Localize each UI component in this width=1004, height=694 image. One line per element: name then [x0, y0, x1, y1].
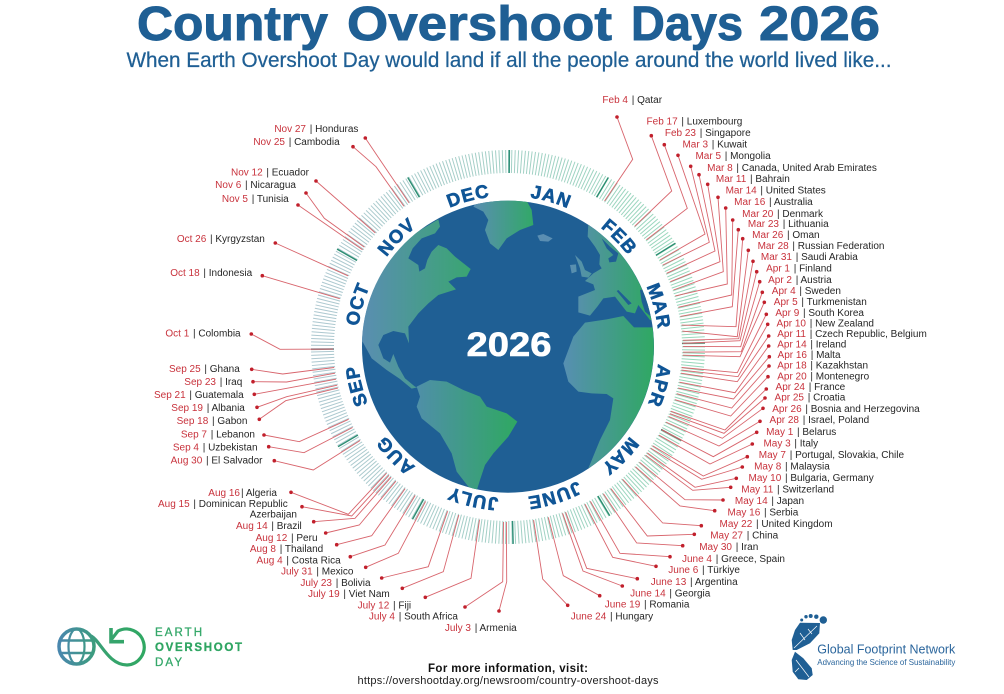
- July 12 Fiji: | Fiji: [393, 600, 411, 612]
- May 30 Iran: May 30: [699, 542, 732, 553]
- June 13 Argentina: | Argentina: [690, 577, 738, 588]
- Apr 11 Czech Republic, Belgium: [681, 329, 927, 382]
- country labels and connectors: right side: [534, 95, 927, 622]
- Mar 20 Denmark: Mar 20: [742, 209, 774, 220]
- Apr 1 Finland: [683, 264, 832, 343]
- Apr 28 Israel, Poland: Apr 28: [770, 415, 799, 426]
- Apr 14 Ireland: [680, 340, 846, 393]
- Mar 3 Kuwait: Mar 3: [682, 140, 708, 150]
- Mar 16 Australia: Mar 16: [734, 197, 766, 208]
- Sep 19 Albania: Sep 19: [171, 403, 203, 414]
- Aug 4 Costa Rica: [257, 495, 415, 566]
- Mar 28 Russian Federation: [682, 241, 884, 337]
- continent: Africa: [563, 316, 662, 470]
- May 1 Belarus: [662, 427, 836, 457]
- June 19 Romania: | Romania: [644, 600, 690, 610]
- Mar 26 Oman: | Oman: [787, 230, 820, 241]
- Nov 25 Cambodia: [253, 137, 404, 206]
- Mar 14 United States: | United States: [760, 186, 826, 196]
- Apr 9 South Korea: [682, 308, 864, 373]
- May 16 Serbia: [636, 467, 799, 518]
- Mar 14 United States: Mar 14: [726, 186, 757, 196]
- Sep 23 Iraq: | Iraq: [220, 377, 242, 388]
- Apr 26 Bosnia and Herzegovina: | Bosnia and Herzegovina: [805, 404, 920, 415]
- Feb 23 Singapore: | Singapore: [700, 128, 751, 139]
- Apr 4 Sweden: [683, 286, 841, 352]
- Nov 5 Tunisia: | Tunisia: [252, 194, 289, 205]
- Sep 25 Ghana: | Ghana: [204, 364, 240, 375]
- May 14 Japan: | Japan: [771, 496, 804, 507]
- May 8 Malaysia: [651, 448, 830, 479]
- Mar 3 Kuwait: [660, 140, 747, 260]
- Apr 28 Israel, Poland: | Israel, Poland: [803, 415, 869, 426]
- May 27 China: | China: [747, 530, 779, 542]
- July 12 Fiji: July 12: [358, 600, 390, 612]
- May 27 China: [611, 489, 779, 542]
- Nov 12 Ecuador: [231, 168, 375, 233]
- continent: South America: [417, 380, 517, 491]
- Apr 1 Finland: Apr 1: [766, 264, 790, 274]
- May 11 Switzerland: [646, 455, 834, 496]
- Apr 14 Ireland: | Ireland: [810, 340, 846, 350]
- Oct 18 Indonesia: [170, 268, 340, 299]
- Nov 25 Cambodia: Nov 25: [253, 137, 285, 148]
- July 19 Viet Nam: [308, 515, 459, 600]
- July 23 Bolivia: | Bolivia: [336, 578, 371, 589]
- Aug 15 Dominican Republic, Azerbaijan: Azerbaijan: [250, 510, 297, 520]
- Apr 2 Austria: [683, 275, 832, 347]
- May 10 Bulgaria, Germany: May 10: [749, 473, 782, 484]
- Mar 5 Mongolia: Mar 5: [695, 151, 721, 162]
- Mar 16 Australia: | Australia: [769, 197, 813, 208]
- Mar 31 Saudi Arabia: Mar 31: [761, 252, 792, 263]
- subtitle: When Earth Overshoot Day would land if all the people around the world lived like...: [126, 49, 892, 72]
- month labels: NOV: [376, 216, 412, 257]
- May 3 Italy: | Italy: [794, 438, 818, 450]
- Aug 30 El Salvador: Aug 30: [171, 456, 203, 466]
- Mar 5 Mongolia: [663, 151, 771, 265]
- Sep 7 Lebanon: Sep 7: [181, 430, 207, 440]
- Aug 16 Algeria: Aug 16: [208, 488, 240, 499]
- text: Day: DAY: [155, 657, 182, 669]
- Oct 18 Indonesia: Oct 18: [170, 268, 200, 279]
- Mar 8 Canada, United Arab Emirates: Mar 8: [707, 163, 733, 174]
- May 14 Japan: [640, 462, 804, 507]
- Aug 12 Peru: [256, 481, 396, 544]
- Sep 19 Albania: [171, 385, 337, 414]
- logo: Global Footprint Network: [792, 614, 956, 680]
- Sep 18 Gabon: [177, 388, 338, 427]
- text: tagline: Advancing the Science of Sustainability: [817, 657, 956, 667]
- Apr 5 Turkmenistan: [683, 297, 867, 357]
- Aug 8 Thailand: Aug 8: [250, 544, 276, 555]
- Oct 1 Colombia: [165, 328, 333, 349]
- Apr 10 New Zealand: Apr 10: [777, 318, 806, 330]
- continent: Eurasia: [578, 224, 652, 320]
- Apr 11 Czech Republic, Belgium: Apr 11: [777, 329, 806, 340]
- May 11 Switzerland: May 11: [741, 484, 774, 496]
- Apr 4 Sweden: | Sweden: [799, 286, 841, 297]
- Nov 27 Honduras: Nov 27: [274, 124, 306, 135]
- Feb 23 Singapore: [646, 128, 751, 240]
- June 6 Türkiye: [585, 504, 740, 576]
- July 3 Armenia: | Armenia: [475, 623, 517, 634]
- Apr 20 Montenegro: | Montenegro: [810, 372, 870, 382]
- Apr 25 Croatia: Apr 25: [775, 392, 804, 404]
- June 19 Romania: [548, 517, 690, 610]
- Aug 15 Dominican Republic, Azerbaijan: | Dominican Republic: [193, 499, 288, 510]
- May 8 Malaysia: | Malaysia: [785, 462, 830, 472]
- July 19 Viet Nam: July 19: [308, 589, 340, 600]
- Apr 10 New Zealand: [681, 318, 874, 377]
- Apr 14 Ireland: Apr 14: [777, 340, 807, 350]
- Aug 4 Costa Rica: | Costa Rica: [286, 556, 341, 566]
- title: [137, 0, 880, 51]
- July 19 Viet Nam: | Viet Nam: [343, 589, 390, 600]
- Apr 2 Austria: Apr 2: [768, 275, 792, 286]
- July 4 South Africa: July 4: [369, 612, 395, 622]
- Mar 11 Bahrain: | Bahrain: [750, 174, 790, 185]
- Aug 30 El Salvador: | El Salvador: [206, 456, 263, 466]
- Mar 16 Australia: [675, 197, 813, 296]
- June 13 Argentina: [566, 512, 738, 588]
- Sep 21 Guatemala: | Guatemala: [189, 390, 244, 401]
- Apr 4 Sweden: Apr 4: [772, 286, 796, 297]
- globe: [362, 200, 654, 493]
- month labels: JULY: [446, 488, 498, 510]
- Apr 18 Kazakhstan: | Kazakhstan: [810, 360, 868, 372]
- July 4 South Africa: | South Africa: [399, 612, 458, 622]
- Aug 30 El Salvador: [171, 440, 360, 470]
- text: Global Footprint Network: Global Footprint Network: [817, 642, 956, 656]
- June 14 Georgia: [563, 513, 711, 600]
- May 10 Bulgaria, Germany: | Bulgaria, Germany: [785, 473, 874, 484]
- month labels: APR: [648, 364, 670, 406]
- Mar 23 Lithuania: | Lithuania: [783, 219, 829, 230]
- Feb 17 Luxembourg: Feb 17: [647, 116, 678, 128]
- Apr 24 France: [671, 382, 846, 430]
- Sep 25 Ghana: Sep 25: [169, 364, 201, 375]
- Mar 14 United States: [674, 186, 826, 290]
- Mar 8 Canada, United Arab Emirates: [667, 163, 877, 273]
- Nov 5 Tunisia: [222, 194, 363, 250]
- Apr 2 Austria: | Austria: [796, 275, 832, 286]
- Nov 12 Ecuador: | Ecuador: [266, 168, 310, 178]
- Apr 25 Croatia: [670, 392, 846, 433]
- Mar 31 Saudi Arabia: [683, 252, 858, 340]
- June 24 Hungary: | Hungary: [610, 612, 653, 622]
- May 7 Portugal, Slovakia, Chile: May 7: [759, 450, 786, 461]
- Apr 24 France: Apr 24: [776, 382, 805, 393]
- July 31 Mexico: July 31: [281, 566, 313, 578]
- Sep 23 Iraq: [184, 373, 335, 388]
- Nov 27 Honduras: [274, 124, 409, 203]
- month labels: JUNE: [528, 482, 580, 510]
- Feb 17 Luxembourg: | Luxembourg: [681, 116, 742, 128]
- Aug 14 Brazil: | Brazil: [271, 521, 302, 532]
- July 12 Fiji: [358, 520, 480, 612]
- July 31 Mexico: | Mexico: [316, 566, 354, 578]
- May 8 Malaysia: May 8: [754, 462, 782, 472]
- calendar tick ring: [311, 150, 705, 544]
- Aug 8 Thailand: | Thailand: [280, 544, 323, 555]
- June 4 Greece, Spain: [590, 501, 785, 565]
- Apr 10 New Zealand: | New Zealand: [810, 318, 874, 330]
- July 31 Mexico: [281, 501, 426, 578]
- Feb 4 Qatar: Feb 4: [602, 95, 628, 106]
- Apr 9 South Korea: Apr 9: [775, 308, 800, 319]
- May 1 Belarus: | Belarus: [797, 427, 836, 438]
- Apr 16 Malta: [678, 350, 841, 399]
- icon: globe with loop arrow: [59, 628, 144, 665]
- Apr 1 Finland: | Finland: [794, 264, 832, 274]
- Oct 26 Kyrgyzstan: | Kyrgyzstan: [210, 234, 265, 245]
- May 22 United Kingdom: May 22: [720, 519, 753, 530]
- May 11 Switzerland: | Switzerland: [777, 484, 834, 496]
- Aug 12 Peru: | Peru: [291, 533, 318, 544]
- year label: 2026: [466, 326, 552, 364]
- May 16 Serbia: May 16: [728, 508, 761, 518]
- month labels: [346, 184, 670, 510]
- month labels: AUG: [378, 438, 416, 474]
- Apr 24 France: | France: [809, 382, 846, 393]
- May 10 Bulgaria, Germany: [647, 453, 874, 487]
- text: Overshoot: OVERSHOOT: [155, 642, 242, 654]
- Nov 27 Honduras: | Honduras: [310, 124, 358, 135]
- Mar 5 Mongolia: | Mongolia: [725, 151, 771, 162]
- Mar 23 Lithuania: Mar 23: [748, 219, 779, 230]
- May 7 Portugal, Slovakia, Chile: [653, 446, 904, 476]
- Apr 18 Kazakhstan: Apr 18: [777, 360, 807, 372]
- July 23 Bolivia: [300, 511, 448, 589]
- sea: Adriatic and Black Sea: [616, 290, 651, 316]
- footer: more information: https://overshootday.org/newsroom/country-overshoot-days: [358, 675, 659, 687]
- Aug 15 Dominican Republic, Azerbaijan: [158, 475, 389, 520]
- continent: Iceland: [537, 234, 553, 242]
- country labels and connectors: left side: [154, 124, 517, 634]
- Mar 11 Bahrain: Mar 11: [716, 174, 747, 185]
- Aug 8 Thailand: [250, 489, 405, 555]
- May 7 Portugal, Slovakia, Chile: | Portugal, Slovakia, Chile: [790, 450, 904, 461]
- Mar 11 Bahrain: [670, 174, 790, 282]
- Sep 23 Iraq: Sep 23: [184, 377, 216, 388]
- Aug 15 Dominican Republic, Azerbaijan: Aug 15: [158, 499, 190, 510]
- Sep 4 Uzbekistan: | Uzbekistan: [203, 442, 258, 454]
- footer: more information: For more information, visit:: [428, 663, 588, 675]
- Sep 21 Guatemala: [154, 379, 336, 401]
- Sep 4 Uzbekistan: Sep 4: [173, 442, 199, 454]
- logo: Earth Overshoot Day: [59, 627, 242, 669]
- June 24 Hungary: June 24: [571, 612, 607, 622]
- month labels: SEP: [346, 368, 367, 406]
- June 4 Greece, Spain: | Greece, Spain: [716, 554, 785, 565]
- continent: Greenland: [474, 200, 534, 250]
- continent: North America: [350, 219, 471, 389]
- Mar 20 Denmark: [678, 209, 824, 307]
- Apr 28 Israel, Poland: [666, 415, 869, 446]
- May 3 Italy: May 3: [763, 438, 791, 450]
- Nov 12 Ecuador: Nov 12: [231, 168, 263, 178]
- Oct 1 Colombia: Oct 1: [165, 328, 190, 340]
- Apr 18 Kazakhstan: [677, 360, 868, 408]
- Oct 1 Colombia: | Colombia: [193, 328, 241, 340]
- sea: Baltic: [602, 238, 618, 262]
- Nov 25 Cambodia: | Cambodia: [289, 137, 340, 148]
- Sep 4 Uzbekistan: [173, 428, 353, 454]
- June 13 Argentina: June 13: [651, 577, 687, 588]
- Sep 21 Guatemala: Sep 21: [154, 390, 186, 401]
- Sep 7 Lebanon: | Lebanon: [211, 430, 255, 440]
- Sep 25 Ghana: [169, 364, 334, 375]
- Sep 18 Gabon: Sep 18: [177, 416, 209, 427]
- July 23 Bolivia: July 23: [300, 578, 332, 589]
- Aug 16 Algeria: | Algeria: [241, 488, 277, 499]
- month labels: OCT: [346, 282, 368, 325]
- June 6 Türkiye: | Türkiye: [702, 565, 740, 576]
- Oct 18 Indonesia: | Indonesia: [203, 268, 253, 279]
- month labels: MAY: [604, 436, 640, 476]
- Apr 26 Bosnia and Herzegovina: [669, 404, 920, 438]
- Feb 4 Qatar: [602, 95, 663, 201]
- Aug 16 Algeria: [208, 473, 387, 514]
- Apr 9 South Korea: | South Korea: [803, 308, 864, 319]
- Apr 20 Montenegro: Apr 20: [777, 372, 807, 382]
- June 19 Romania: June 19: [605, 600, 641, 610]
- footer: more information: [358, 663, 659, 687]
- Oct 26 Kyrgyzstan: [177, 234, 348, 276]
- Apr 5 Turkmenistan: Apr 5: [774, 297, 798, 308]
- May 22 United Kingdom: [623, 479, 833, 530]
- May 22 United Kingdom: | United Kingdom: [756, 519, 833, 530]
- June 14 Georgia: June 14: [630, 588, 666, 600]
- Nov 6 Nicaragua: | Nicaragua: [245, 180, 296, 191]
- Aug 4 Costa Rica: Aug 4: [257, 556, 283, 566]
- Sep 18 Gabon: | Gabon: [212, 416, 247, 427]
- May 27 China: May 27: [710, 530, 743, 542]
- Aug 12 Peru: Aug 12: [256, 533, 288, 544]
- Nov 5 Tunisia: Nov 5: [222, 194, 248, 205]
- Apr 16 Malta: | Malta: [811, 350, 841, 361]
- Feb 23 Singapore: Feb 23: [665, 128, 696, 139]
- May 30 Iran: | Iran: [736, 542, 758, 553]
- May 3 Italy: [659, 435, 818, 464]
- Oct 26 Kyrgyzstan: Oct 26: [177, 234, 207, 245]
- May 14 Japan: May 14: [735, 496, 768, 507]
- Mar 23 Lithuania: [680, 219, 829, 316]
- icon: leaf footprint: [792, 614, 827, 680]
- June 14 Georgia: | Georgia: [669, 588, 711, 600]
- Mar 26 Oman: Mar 26: [752, 230, 784, 241]
- continent: British Isles: [570, 255, 592, 278]
- July 4 South Africa: [369, 522, 504, 622]
- Apr 5 Turkmenistan: | Turkmenistan: [801, 297, 867, 308]
- Mar 20 Denmark: | Denmark: [777, 209, 824, 220]
- Mar 28 Russian Federation: | Russian Federation: [792, 241, 884, 252]
- June 6 Türkiye: June 6: [668, 565, 699, 576]
- Nov 6 Nicaragua: [215, 180, 364, 247]
- text: Earth: EARTH: [155, 627, 202, 639]
- May 16 Serbia: | Serbia: [764, 508, 799, 518]
- Nov 6 Nicaragua: Nov 6: [215, 180, 242, 191]
- Sep 7 Lebanon: [181, 419, 349, 442]
- Mar 8 Canada, United Arab Emirates: | Canada, United Arab Emirates: [736, 163, 877, 174]
- Aug 14 Brazil: [236, 477, 391, 532]
- May 1 Belarus: May 1: [766, 427, 794, 438]
- month labels: FEB: [601, 218, 636, 254]
- Sep 19 Albania: | Albania: [207, 403, 245, 414]
- month labels: MAR: [646, 282, 670, 329]
- Apr 16 Malta: Apr 16: [778, 350, 807, 361]
- June 24 Hungary: [534, 520, 653, 622]
- Mar 28 Russian Federation: Mar 28: [758, 241, 789, 252]
- Apr 25 Croatia: | Croatia: [808, 392, 846, 404]
- Aug 14 Brazil: Aug 14: [236, 521, 268, 532]
- Apr 26 Bosnia and Herzegovina: Apr 26: [772, 404, 802, 415]
- Mar 3 Kuwait: | Kuwait: [712, 140, 747, 150]
- month labels: JAN: [530, 185, 572, 208]
- July 3 Armenia: July 3: [445, 623, 471, 634]
- Apr 20 Montenegro: [675, 372, 870, 416]
- May 30 Iran: [603, 494, 758, 553]
- Mar 26 Oman: [682, 230, 820, 327]
- Apr 11 Czech Republic, Belgium: | Czech Republic, Belgium: [810, 329, 927, 340]
- Mar 31 Saudi Arabia: | Saudi Arabia: [796, 252, 858, 263]
- Feb 17 Luxembourg: [635, 116, 742, 226]
- June 4 Greece, Spain: June 4: [682, 554, 712, 565]
- month labels: DEC: [446, 184, 489, 208]
- Feb 4 Qatar: | Qatar: [632, 95, 663, 106]
- July 3 Armenia: [445, 522, 517, 634]
